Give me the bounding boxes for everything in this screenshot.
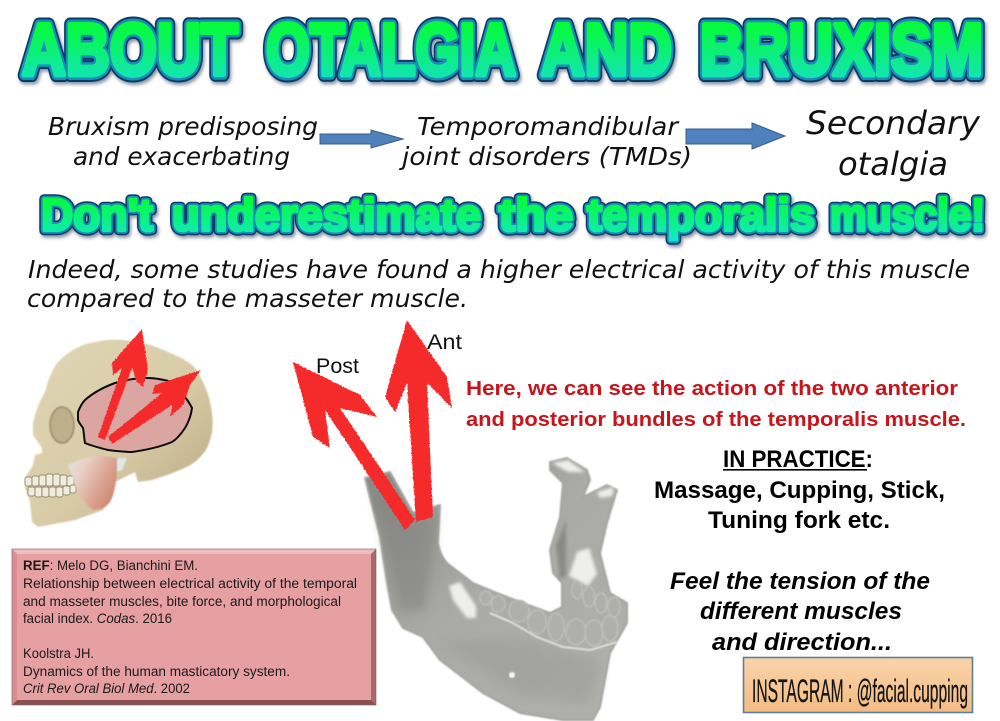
jaw body shading [440, 640, 600, 705]
flow step: secondary otalgia: otalgia [838, 145, 948, 183]
arrow: TMD to otalgia [686, 123, 785, 149]
mental foramen [509, 672, 515, 678]
red explanation text: Here, we can see the action of the two anterior [466, 378, 958, 400]
title: ABOUT [22, 10, 238, 91]
feel the tension text: and direction... [712, 629, 892, 656]
flow step: secondary otalgia [806, 104, 981, 183]
intro text: Indeed, some studies have found a higher electrical activity of this muscle [28, 255, 970, 284]
subheading: underestimate [172, 190, 481, 240]
references text: Koolstra JH. [23, 646, 94, 661]
subheading: the [499, 190, 573, 240]
skull arrow 2 [108, 370, 201, 444]
label: ant: Ant [427, 331, 462, 354]
temporalis outline [78, 378, 192, 452]
references text: Dynamics of the human masticatory system. [23, 664, 290, 679]
feel the tension text [670, 568, 930, 656]
subheading: underestimate [172, 190, 481, 240]
title: AND [541, 10, 672, 91]
subheading: Don't [41, 190, 153, 240]
flow step: temporomandibular joint disorders: joint disorders (TMDs) [399, 142, 692, 171]
teeth [25, 474, 76, 497]
red explanation text [466, 378, 966, 431]
subheading: temporalis [587, 190, 815, 240]
gum line [490, 613, 617, 650]
flow step: bruxism: and exacerbating [73, 142, 290, 171]
flow step: bruxism: Bruxism predisposing [48, 112, 318, 141]
title [22, 10, 983, 91]
subheading: Don't [41, 190, 153, 240]
in practice block: IN PRACTICE: [723, 446, 873, 473]
illustration: skull with temporalis arrows [25, 329, 213, 527]
flow step: secondary otalgia: Secondary [806, 104, 981, 142]
references text: facial index. Codas. 2016 [23, 611, 172, 626]
subheading: Don't [41, 190, 153, 240]
title: ABOUT [22, 10, 238, 91]
subheading: the [499, 190, 573, 240]
subheading: underestimate [172, 190, 481, 240]
in practice block: Tuning fork etc. [708, 507, 890, 534]
eye socket [50, 407, 74, 443]
feel the tension text: Feel the tension of the [670, 568, 930, 595]
red explanation text: and posterior bundles of the temporalis muscle. [466, 409, 966, 431]
references text [23, 558, 357, 696]
instagram badge [744, 658, 972, 712]
title: AND [541, 10, 672, 91]
title: OTALGIA [266, 10, 516, 91]
title: OTALGIA [266, 10, 516, 91]
arrow: anterior bundle [385, 320, 452, 522]
feel the tension text: different muscles [700, 598, 902, 625]
illustration: mandible [365, 458, 627, 720]
flow step: temporomandibular joint disorders [399, 112, 692, 171]
references text: Crit Rev Oral Biol Med. 2002 [23, 681, 190, 696]
subheading: temporalis [587, 190, 815, 240]
arrow: bruxism to TMD [320, 130, 403, 148]
intro text [27, 255, 970, 313]
lower teeth [480, 581, 620, 646]
subheading: the [499, 190, 573, 240]
references text: REF: Melo DG, Bianchini EM. [23, 558, 198, 573]
flow step: temporomandibular joint disorders: Temporomandibular [417, 112, 680, 141]
masseter muscle [68, 455, 118, 510]
references text: Relationship between electrical activity of the temporal [23, 576, 357, 591]
subheading: temporalis [587, 190, 815, 240]
jaw joint ligament [117, 458, 127, 472]
intro text: compared to the masseter muscle. [27, 284, 468, 313]
title: OTALGIA [266, 10, 516, 91]
ramus inner dark [556, 520, 566, 580]
ramus shading [372, 485, 436, 610]
references panel [12, 549, 376, 705]
skull arrow 1 [98, 329, 148, 440]
flow step: bruxism [48, 112, 318, 171]
skull [25, 340, 213, 527]
in practice block: Massage, Cupping, Stick, [654, 477, 945, 504]
bone highlights [449, 460, 614, 618]
jaw bone [365, 458, 627, 720]
title: ABOUT [22, 10, 238, 91]
subheading: muscle! [830, 190, 985, 240]
in practice block [654, 446, 945, 534]
title: AND [541, 10, 672, 91]
arrow: posterior bundle [293, 362, 415, 530]
subheading [41, 190, 985, 240]
subheading: muscle! [830, 190, 985, 240]
panel bevel [12, 549, 376, 705]
references text: and masseter muscles, bite force, and morphological [23, 594, 341, 609]
label: post: Post [316, 355, 359, 378]
subheading: muscle! [830, 190, 985, 240]
